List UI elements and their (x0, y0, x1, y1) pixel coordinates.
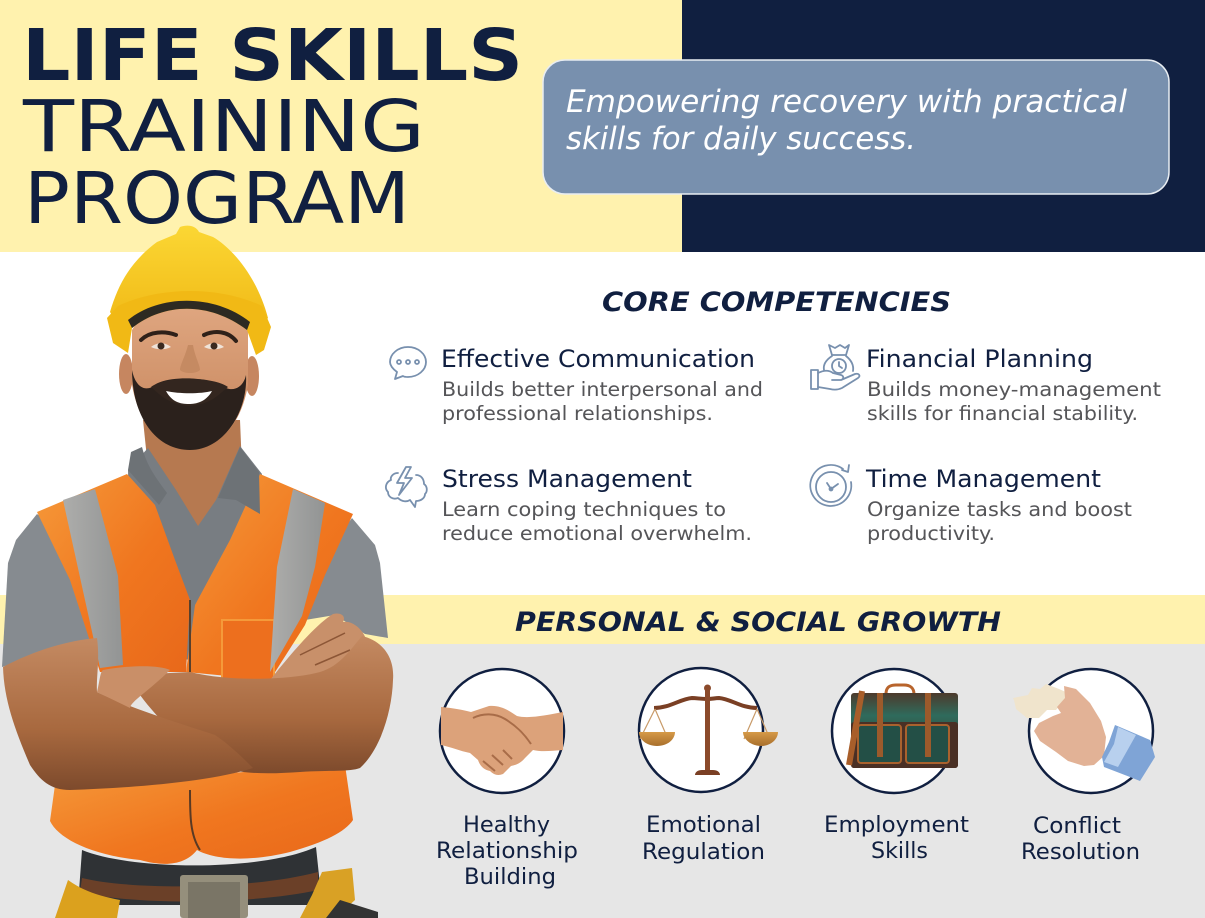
nose (180, 345, 200, 373)
competency: effective communication (390, 345, 763, 425)
title: TRAINING (22, 85, 425, 168)
growth item: healthy relationship building (436, 669, 578, 890)
growth item: conflict resolution (1013, 669, 1155, 865)
competency: stress management: reduce emotional overwhelm. (442, 522, 752, 545)
left tool pouch (55, 880, 120, 918)
competency: stress management (386, 465, 752, 545)
photo: construction worker with crossed arms (2, 226, 393, 918)
beard (132, 370, 246, 450)
competency: financial planning (811, 345, 1161, 425)
shirt body (128, 446, 262, 664)
growth item: emotional regulation: Regulation (642, 840, 765, 865)
collar (128, 447, 260, 514)
section background: personal and social growth band (0, 595, 1205, 644)
right arm (130, 636, 393, 773)
ear left (119, 354, 133, 394)
vest lower seam (190, 790, 200, 850)
ear right (245, 356, 259, 396)
face (132, 306, 248, 449)
icon: brain with lightning bolt (386, 467, 427, 507)
header: navy background (682, 0, 1205, 252)
eyes (151, 343, 224, 349)
right hand fingers (270, 614, 366, 680)
competency: stress management: Stress Management (442, 465, 692, 493)
reflective strip left (63, 489, 123, 668)
growth item: employment skills: Skills (871, 839, 928, 864)
tagline callout: skills for daily success. (566, 121, 916, 157)
icon: balance scales (639, 668, 778, 792)
competency: stress management: Learn coping techniques to (442, 498, 726, 521)
growth item: employment skills: Employment (824, 813, 969, 838)
vest pocket (222, 620, 274, 680)
title (22, 14, 523, 240)
tagline callout (543, 60, 1169, 194)
vest centre seam (189, 600, 191, 672)
icon: handshake (440, 669, 564, 793)
section background: grey lower panel (0, 644, 1205, 918)
left hand on elbow (97, 666, 170, 708)
heading: personal and social growth: PERSONAL & SOCIAL GROWTH (515, 607, 1001, 638)
tools (326, 900, 378, 918)
icon: leather briefcase (832, 669, 958, 793)
competency: time management: Organize tasks and boost (867, 498, 1132, 521)
belt buckle (180, 875, 248, 918)
tagline callout: Empowering recovery with practical (566, 84, 1127, 120)
hard hat (110, 226, 268, 330)
vest lower (50, 765, 353, 864)
growth item: conflict resolution: Conflict (1033, 814, 1121, 839)
growth item: conflict resolution: Resolution (1021, 840, 1140, 865)
right tool pouch (300, 868, 355, 918)
growth item: employment skills (824, 669, 969, 864)
vest right panel (186, 474, 353, 680)
hat inner band (128, 301, 250, 330)
competency: time management: productivity. (867, 522, 995, 545)
competency: financial planning: Builds money-management (867, 378, 1161, 401)
icon: stopwatch clock (810, 465, 851, 506)
icon: hand holding puzzle piece (1013, 669, 1155, 793)
moustache and mouth (151, 379, 228, 406)
eyebrows (141, 332, 236, 341)
competency: effective communication: Effective Communication (441, 345, 755, 373)
left sleeve (2, 514, 100, 667)
icon: hand holding money bag (811, 345, 859, 390)
right sleeve (305, 518, 388, 638)
growth item: emotional regulation: Emotional (646, 813, 761, 838)
competency: time management: Time Management (865, 465, 1101, 493)
competency: financial planning: Financial Planning (866, 345, 1093, 373)
icon: speech bubble (390, 347, 426, 379)
title: LIFE SKILLS (22, 14, 523, 97)
growth item: emotional regulation (639, 668, 778, 865)
heading: core competencies: CORE COMPETENCIES (602, 287, 951, 318)
growth item: healthy relationship building: Healthy (463, 813, 550, 838)
growth item: healthy relationship building: Building (464, 865, 556, 890)
left arm (3, 638, 253, 790)
hat brim (107, 291, 271, 355)
competency: effective communication: professional relationships. (442, 402, 713, 425)
header: yellow title background (0, 0, 682, 252)
title: PROGRAM (24, 157, 410, 240)
competency: effective communication: Builds better interpersonal and (442, 378, 763, 401)
neck (143, 420, 242, 528)
competency: financial planning: skills for financial stability. (867, 402, 1138, 425)
vest left panel (37, 474, 190, 672)
competency: time management (810, 465, 1132, 545)
belt (78, 847, 320, 905)
growth item: healthy relationship building: Relationship (436, 839, 578, 864)
reflective strip right (270, 489, 325, 672)
